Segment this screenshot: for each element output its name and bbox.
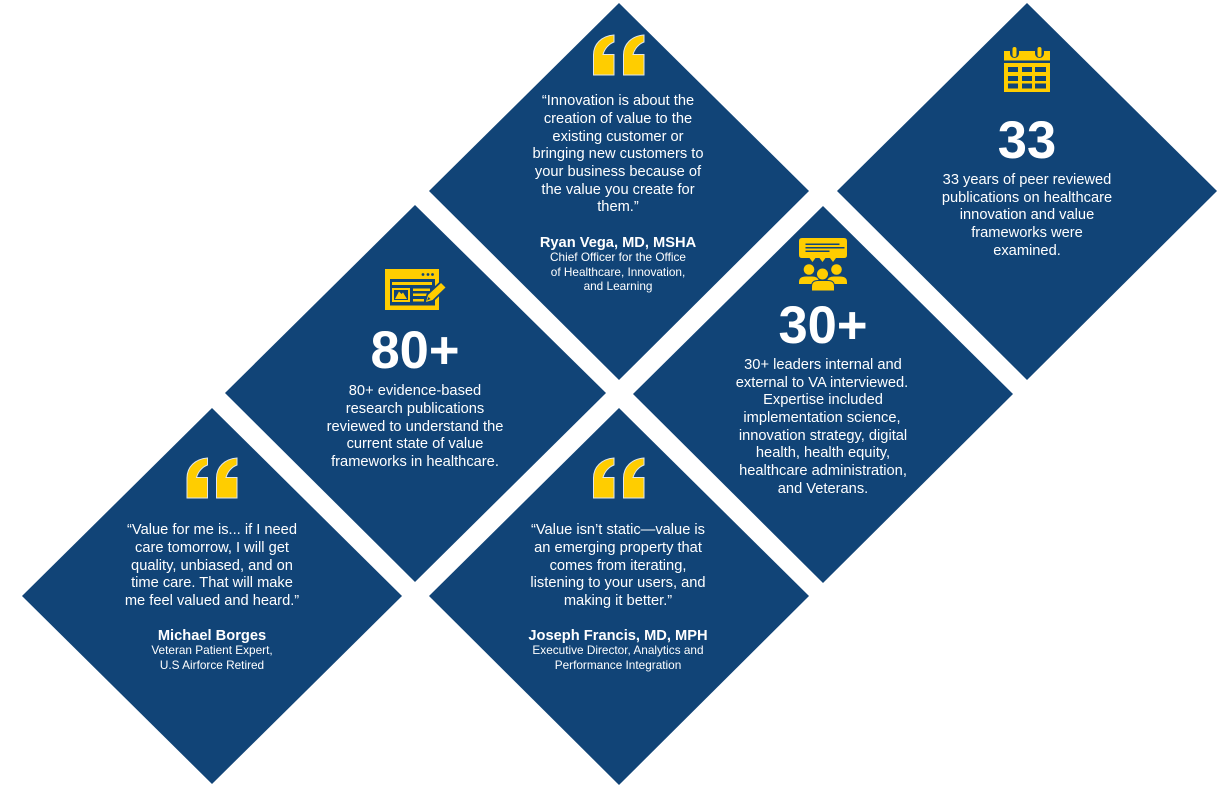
- attribution: Ryan Vega: of Healthcare, Innovation,: [551, 265, 685, 279]
- icon: quotation marks: [187, 458, 237, 498]
- text: 80+ description: reviewed to understand the: [327, 419, 503, 435]
- quote text: [125, 522, 299, 609]
- attribution: Joseph Francis: [528, 628, 708, 672]
- quote text: “Value isn’t static—value is: [531, 522, 705, 538]
- icon: quotation marks: [594, 458, 644, 498]
- text: 30+ description: healthcare administration,: [739, 463, 907, 479]
- big number: 33: 33: [998, 111, 1056, 170]
- icon: calendar: [1004, 47, 1050, 92]
- attribution: Joseph Francis: Executive Director, Analytics and: [532, 643, 704, 657]
- panel: Michael Borges quote: [22, 408, 402, 784]
- quote text: listening to your users, and: [530, 575, 706, 591]
- text: 33 description: innovation and value: [960, 207, 1094, 223]
- quote text: them.”: [597, 199, 639, 215]
- quote text: quality, unbiased, and on: [131, 558, 293, 574]
- text: 80+ description: current state of value: [347, 436, 483, 452]
- text: 30+ description: implementation science,: [743, 410, 901, 426]
- quote text: creation of value to the: [544, 111, 692, 127]
- quote text: “Value for me is... if I need: [127, 522, 297, 538]
- text: 30+ description: health, health equity,: [756, 445, 890, 461]
- text: 30+ description: external to VA interviewed.: [736, 375, 908, 391]
- quote text: [532, 93, 704, 215]
- attribution: Joseph Francis: Joseph Francis, MD, MPH: [528, 628, 708, 644]
- icon: group with speech bubble: [799, 238, 847, 291]
- quote text: me feel valued and heard.”: [125, 593, 299, 609]
- attribution: Ryan Vega: Ryan Vega, MD, MSHA: [540, 235, 697, 251]
- quote text: an emerging property that: [534, 540, 702, 556]
- text: 33 description: publications on healthcare: [942, 190, 1112, 206]
- text: 80+ description: frameworks in healthcare.: [331, 454, 499, 470]
- panel: 30+ leaders: [633, 206, 1013, 583]
- quote text: [530, 522, 706, 609]
- quote text: comes from iterating,: [550, 558, 686, 574]
- text: 80+ description: research publications: [346, 401, 484, 417]
- quote text: existing customer or: [552, 129, 684, 145]
- icon: quotation marks: [594, 35, 644, 75]
- text: 80+ description: 80+ evidence-based: [349, 383, 481, 399]
- attribution: Michael Borges: U.S Airforce Retired: [160, 658, 264, 672]
- quote text: “Innovation is about the: [542, 93, 694, 109]
- text: 30+ description: 30+ leaders internal and: [744, 357, 902, 373]
- text: 30+ description: [736, 357, 908, 497]
- attribution: Joseph Francis: Performance Integration: [555, 658, 681, 672]
- text: 33 description: [942, 172, 1112, 259]
- panel: 33 years: [837, 3, 1217, 380]
- text: 33 description: 33 years of peer reviewed: [943, 172, 1111, 188]
- attribution: Ryan Vega: [540, 235, 697, 293]
- panel: Joseph Francis quote: [429, 408, 809, 785]
- big number: 80+: 80+: [370, 321, 460, 380]
- panel: 80+ publications: [225, 205, 606, 582]
- text: 30+ description: innovation strategy, digital: [739, 428, 907, 444]
- quote text: your business because of: [535, 164, 702, 180]
- text: 33 description: examined.: [993, 243, 1061, 259]
- quote text: care tomorrow, I will get: [135, 540, 289, 556]
- text: 33 description: frameworks were: [971, 225, 1083, 241]
- quote text: bringing new customers to: [532, 146, 704, 162]
- text: 30+ description: and Veterans.: [778, 481, 868, 497]
- attribution: Ryan Vega: Chief Officer for the Office: [550, 250, 686, 264]
- quote text: the value you create for: [541, 182, 695, 198]
- big number: 30+: 30+: [778, 296, 868, 355]
- attribution: Michael Borges: [151, 628, 273, 672]
- quote text: making it better.”: [564, 593, 672, 609]
- quote text: time care. That will make: [131, 575, 293, 591]
- attribution: Michael Borges: Michael Borges: [158, 628, 266, 644]
- attribution: Ryan Vega: and Learning: [584, 279, 652, 293]
- icon: web page and pencil: [385, 269, 448, 310]
- panel: Ryan Vega quote: [429, 3, 809, 380]
- attribution: Michael Borges: Veteran Patient Expert,: [151, 643, 273, 657]
- text: 80+ description: [327, 383, 503, 470]
- text: 30+ description: Expertise included: [763, 392, 883, 408]
